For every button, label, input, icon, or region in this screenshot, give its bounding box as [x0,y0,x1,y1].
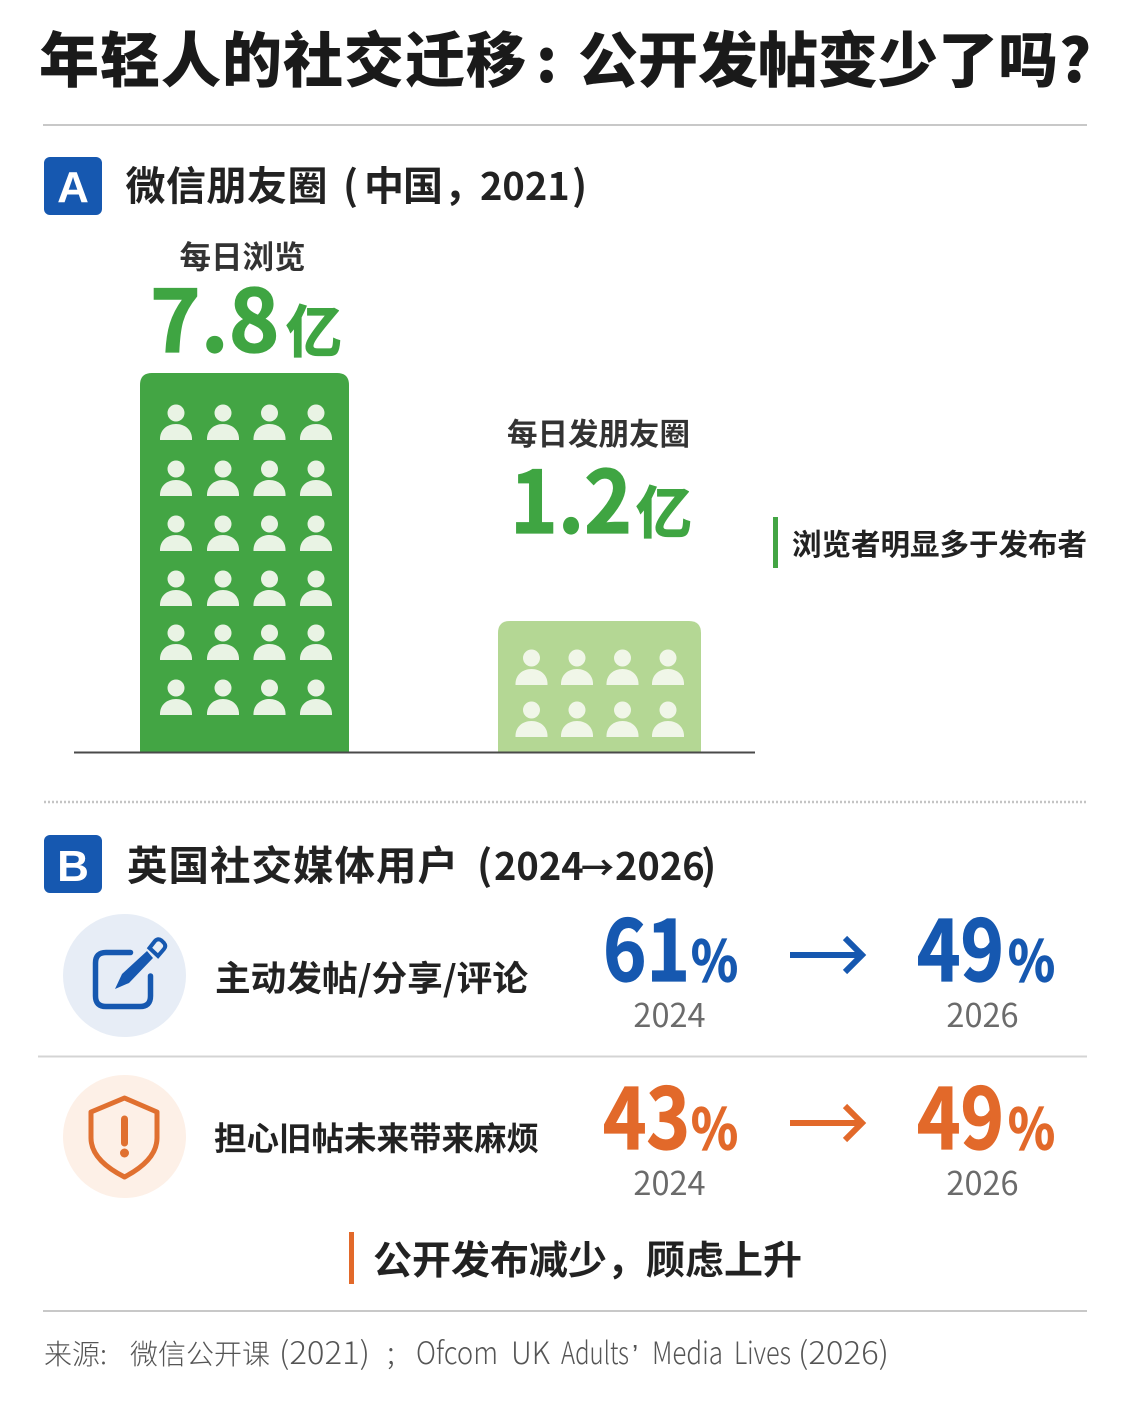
title: 公开发帖变少了吗 [578,13,1058,100]
panel: section A WeChat Moments [44,154,1087,752]
source footnote: (2021) [279,1328,370,1373]
badge A [44,157,102,215]
stat: 49% 2026: 49 [917,885,1004,1006]
source footnote: ’ [632,1339,638,1370]
stat: 43% 2024: 43 [603,1053,690,1174]
heading A: ， [444,154,484,212]
source footnote: 来源: [44,1333,107,1373]
icon: shield warning [63,1075,186,1198]
bar: daily posts [498,621,701,752]
stat: 61% 2024: 2024 [633,990,706,1037]
stat: 49% 2026: 49 [917,1053,1004,1174]
stat: 61% 2024: 61 [603,885,690,1006]
label: daily views: 每日浏览 [180,232,306,278]
label: daily posts: 每日发朋友圈 [507,410,690,454]
icon: edit [63,914,186,1037]
heading A: 中国 [364,154,442,212]
stat: 61% 2024: % [691,917,738,998]
stat: 49% 2026 [917,1053,1055,1205]
value: 7.8亿: 7.8 [150,252,279,377]
source footnote: UK [511,1328,551,1373]
stat: 49% 2026 [917,885,1055,1037]
stat: 43% 2024: 2024 [633,1158,706,1205]
title: 年轻人的社交迁移 [39,13,527,100]
value: 1.2亿: 1.2 [510,433,632,558]
heading B: → [581,842,614,890]
stat: 43% 2024: % [691,1085,738,1166]
source footnote: 微信公开课 [130,1333,270,1373]
value: 1.2亿: 亿 [636,469,692,550]
arrow orange [790,1106,862,1140]
stat: 49% 2026: % [1008,1085,1055,1166]
badge A: A [57,163,89,212]
value: 7.8亿 [150,252,342,377]
stat: 43% 2024 [603,1053,738,1205]
heading A: ) [572,154,587,212]
stat: 49% 2026: 2026 [946,990,1019,1037]
callout: conclusion: 公开发布减少，顾虑上升 [373,1230,802,1286]
heading B: 2024 [494,836,584,891]
title: : [536,13,557,100]
row label: active posting: 主动发帖/分享/评论 [215,951,528,1002]
heading B: ( [477,833,492,892]
heading B: ) [701,833,716,892]
source footnote [44,1328,889,1373]
badge B [44,835,102,893]
row label: worry about old posts: 担心旧帖未来带来麻烦 [214,1113,539,1160]
stat: 49% 2026: % [1008,917,1055,998]
source footnote: Ofcom [416,1328,498,1373]
value: 7.8亿: 亿 [286,288,342,369]
source footnote: ; [387,1328,395,1373]
stat: 49% 2026: 2026 [946,1158,1019,1205]
heading B: 2026 [615,836,705,891]
stat: 61% 2024 [603,885,738,1037]
source footnote: Media [652,1328,723,1373]
panel: section B UK social media users [38,833,1087,1286]
title: ? [1059,13,1091,100]
arrow blue [790,938,862,972]
source footnote: (2026) [798,1328,889,1373]
heading A: ( [343,154,358,212]
bar: daily views [140,373,349,752]
callout: viewers outnumber posters: 浏览者明显多于发布者 [792,522,1087,564]
heading B: 英国社交媒体用户 [127,833,459,892]
badge B: B [57,842,89,891]
heading A: 2021 [480,156,570,211]
source footnote: Adults [561,1328,629,1373]
heading A: 微信朋友圈 [126,154,328,212]
source footnote: Lives [734,1328,791,1373]
